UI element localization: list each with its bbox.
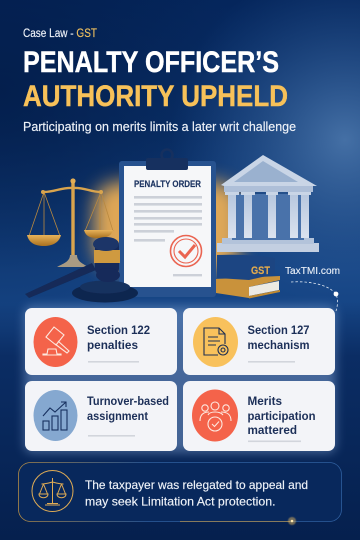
dotted connector <box>291 282 338 311</box>
illustration: gavel <box>25 237 138 302</box>
illustration: scales of justice <box>27 178 113 267</box>
clipboard clip <box>146 150 188 170</box>
panel: merits participation mattered: Merits <box>248 394 282 408</box>
icon: team with check on coral circle <box>192 390 238 442</box>
callout: conclusion <box>18 462 342 525</box>
panel: merits participation mattered <box>183 381 335 451</box>
subtitle: Participating on merits limits a later writ challenge <box>23 120 296 134</box>
illustration: temple <box>217 155 319 252</box>
panel: turnover-based assignment: Turnover-based <box>87 394 169 408</box>
title: PENALTY OFFICER’S <box>23 46 279 79</box>
callout text <box>85 478 308 508</box>
icon: gavel on coral circle <box>34 317 78 367</box>
panel: section 127 mechanism: Section 127 <box>248 323 310 337</box>
panel: section 122 penalties: Section 122 <box>87 323 150 337</box>
website label: TaxTMI.com <box>285 266 340 277</box>
icon: rising bar chart on blue circle <box>34 390 78 441</box>
panel: merits participation mattered: mattered <box>248 423 297 437</box>
panel: turnover-based assignment: assignment <box>87 409 148 423</box>
panel: section 127 mechanism: mechanism <box>248 338 310 352</box>
panel: section 127 mechanism <box>183 308 335 375</box>
eyebrow: case law: Case Law - GST <box>23 28 97 40</box>
document lines <box>134 196 202 276</box>
panel: turnover-based assignment <box>25 381 177 451</box>
icon: document with gear on amber circle <box>193 317 238 367</box>
approval stamp <box>170 236 202 266</box>
panel: section 122 penalties: penalties <box>87 338 138 352</box>
callout text: The taxpayer was relegated to appeal and <box>85 478 308 492</box>
illustration: law books <box>216 255 280 298</box>
callout text: may seek Limitation Act protection. <box>85 494 276 508</box>
title <box>23 46 288 113</box>
panel: merits participation mattered: participation <box>248 409 316 423</box>
title: AUTHORITY UPHELD <box>23 80 288 113</box>
document heading: PENALTY ORDER <box>134 179 201 190</box>
icon: scales in gold ring <box>32 470 73 512</box>
illustration: law books: GST <box>251 265 270 277</box>
illustration: clipboard with penalty order <box>119 150 216 297</box>
panel: section 122 penalties <box>25 308 177 375</box>
